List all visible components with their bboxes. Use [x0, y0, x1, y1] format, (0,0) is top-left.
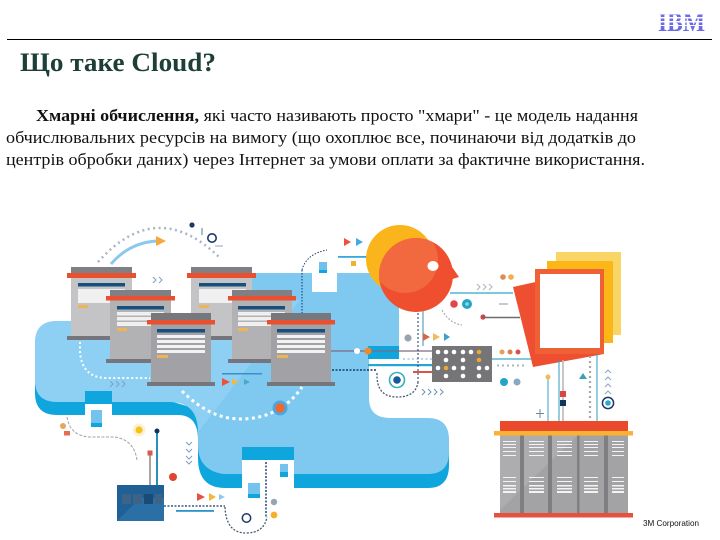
intro text block: обчислювальних ресурсів на вимогу (що охоплює все, починаючи від додатків до: [6, 128, 636, 147]
balloon head: [366, 225, 459, 312]
connector lines centre: [331, 310, 432, 382]
footer: corporation: 3M Corporation: [643, 518, 699, 528]
bottom phones and dotted line: [248, 462, 288, 518]
logo: IBM: IBM: [658, 8, 705, 37]
intro text block: центрів обробки даних) через Інтернет за умови оплати за фактичне використання.: [6, 150, 645, 169]
markers right of dot panel: [492, 350, 531, 386]
server 5: [228, 290, 296, 363]
white dotted connectors on cloud: [80, 342, 302, 419]
phone icon and top-right markers: [302, 238, 367, 313]
server 6: [267, 313, 335, 386]
intro text block: [6, 106, 645, 169]
row of icons left of dot panel: [404, 333, 450, 342]
paper stack: [513, 252, 621, 367]
top arc with arrow: [98, 222, 223, 264]
title: Що таке Cloud?: [20, 48, 216, 77]
markers under servers: [222, 373, 262, 386]
blue network box: [117, 428, 177, 521]
server 1: [67, 267, 136, 340]
lower-left phone and dashed curve: [60, 410, 146, 460]
chevrons on cloud: [110, 381, 125, 387]
cloud background: [35, 273, 449, 492]
target with dashed arc: [377, 372, 443, 397]
bottom connector with triangles: [164, 493, 267, 533]
chevrons near servers: [153, 277, 162, 283]
server 3: [147, 313, 215, 386]
server 2: [106, 290, 175, 363]
server rack: [494, 421, 633, 518]
orange target on cloud: [272, 400, 288, 416]
dot matrix panel: [432, 346, 492, 382]
chevrons lower: [186, 442, 192, 464]
rack connectors: [536, 354, 614, 421]
intro text block: Хмарні обчислення, які часто називають просто "хмари" - це модель надання: [36, 106, 638, 125]
small markers around balloon: [442, 274, 520, 325]
server 4: [187, 267, 256, 340]
